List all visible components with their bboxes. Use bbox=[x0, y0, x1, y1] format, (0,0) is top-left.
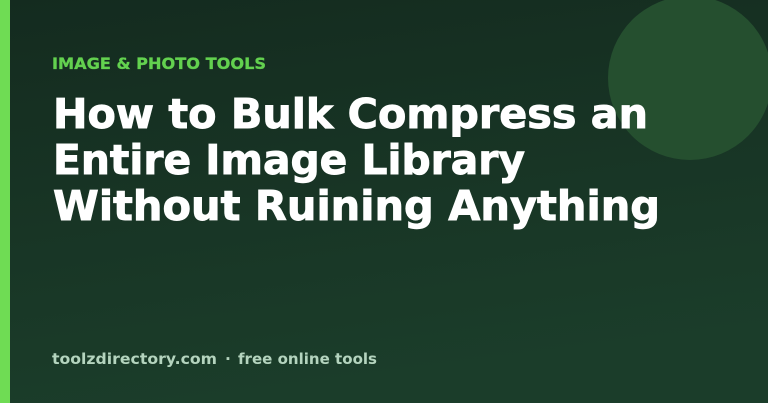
title line 2: Entire Image Library bbox=[53, 136, 525, 184]
decorative circle bbox=[608, 0, 768, 160]
site name: toolzdirectory.com bbox=[52, 350, 217, 368]
category label: IMAGE & PHOTO TOOLS bbox=[52, 54, 266, 73]
left accent bar bbox=[0, 0, 10, 403]
title line 3: Without Ruining Anything bbox=[53, 182, 660, 230]
title bbox=[53, 90, 660, 230]
footer text bbox=[52, 350, 377, 368]
separator dot: · bbox=[225, 350, 231, 368]
tagline: free online tools bbox=[238, 350, 377, 368]
title line 1: How to Bulk Compress an bbox=[53, 90, 648, 138]
